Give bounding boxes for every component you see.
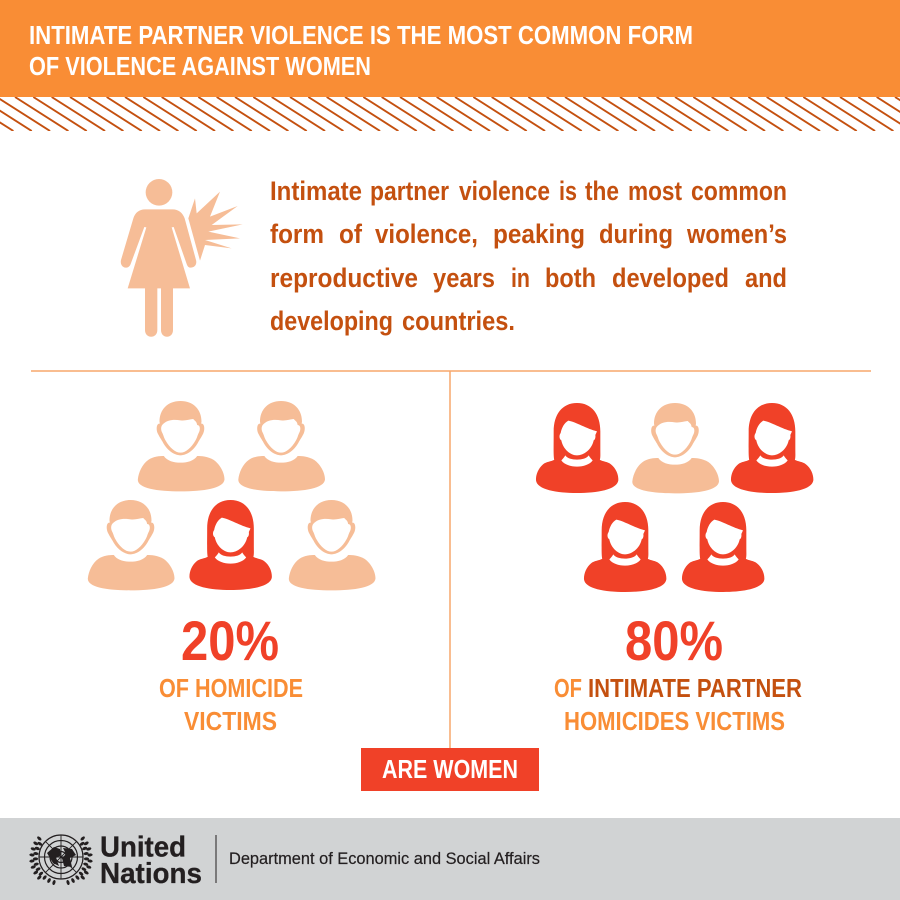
icon: UN emblem [29, 835, 93, 885]
label: of intimate partner homicides victims: HOMICIDES VICTIMS [564, 706, 785, 736]
label: of intimate partner homicides victims [554, 673, 802, 736]
label: of homicide victims [159, 673, 303, 736]
logotype: United Nations [100, 832, 202, 890]
title: OF VIOLENCE AGAINST WOMEN [29, 51, 371, 81]
intro text: developing [270, 306, 393, 336]
statistic: 80%: 80% [625, 609, 723, 672]
callout: are women: ARE WOMEN [382, 754, 518, 784]
intro text: women’s [686, 219, 787, 249]
intro text: form [270, 219, 324, 249]
intro text: years [433, 263, 495, 293]
intro text [270, 176, 787, 336]
logotype: United Nations: United [100, 832, 186, 864]
icon: woman [189, 500, 272, 590]
intro text: most [628, 176, 682, 206]
intro text: reproductive [270, 263, 418, 293]
icon: woman [731, 403, 813, 493]
callout: are women [361, 748, 539, 791]
icon group: four women in five victims [536, 403, 813, 592]
panel dividers [31, 371, 871, 748]
title [29, 20, 693, 81]
intro text: violence, [375, 219, 478, 249]
intro text: is [559, 176, 577, 206]
icon: woman [536, 403, 618, 493]
intro text: Intimate [270, 176, 362, 206]
panel: intimate partner homicide victims [536, 403, 813, 736]
footer band [0, 818, 900, 900]
panel: homicide victims [88, 401, 375, 736]
striped band [0, 97, 900, 131]
logotype: United Nations: Nations [100, 858, 202, 890]
icon: man [138, 401, 224, 491]
intro text: during [599, 219, 673, 249]
label: of homicide victims: OF HOMICIDE [159, 673, 303, 703]
icon: man [238, 401, 325, 491]
intro text: peaking [493, 219, 585, 249]
label: of homicide victims: VICTIMS [184, 706, 277, 736]
icon: woman with impact burst [121, 179, 243, 337]
department name: Department of Economic and Social Affairs [229, 849, 540, 868]
icon: woman [584, 502, 666, 592]
intro text: in [511, 263, 530, 293]
intro text: developed [612, 263, 729, 293]
icon: woman [682, 502, 764, 592]
intro text: countries. [402, 306, 515, 336]
intro text: and [745, 263, 787, 293]
intro text: partner [370, 176, 449, 206]
intro text: common [691, 176, 787, 206]
intro text: violence [459, 176, 550, 206]
icon: man [632, 403, 719, 493]
header banner [0, 0, 900, 97]
icon: man [88, 500, 174, 590]
label: of intimate partner homicides victims: INTIMATE PARTNER [588, 673, 802, 703]
icon: man [289, 500, 375, 590]
intro text: the [585, 176, 619, 206]
label: of intimate partner homicides victims: OF [554, 673, 582, 703]
icon group: one woman in five victims [88, 401, 375, 590]
title: INTIMATE PARTNER VIOLENCE IS THE MOST COMMON FORM [29, 20, 693, 50]
intro text: of [339, 219, 362, 249]
statistic: 20%: 20% [181, 609, 279, 672]
intro text: both [545, 263, 596, 293]
